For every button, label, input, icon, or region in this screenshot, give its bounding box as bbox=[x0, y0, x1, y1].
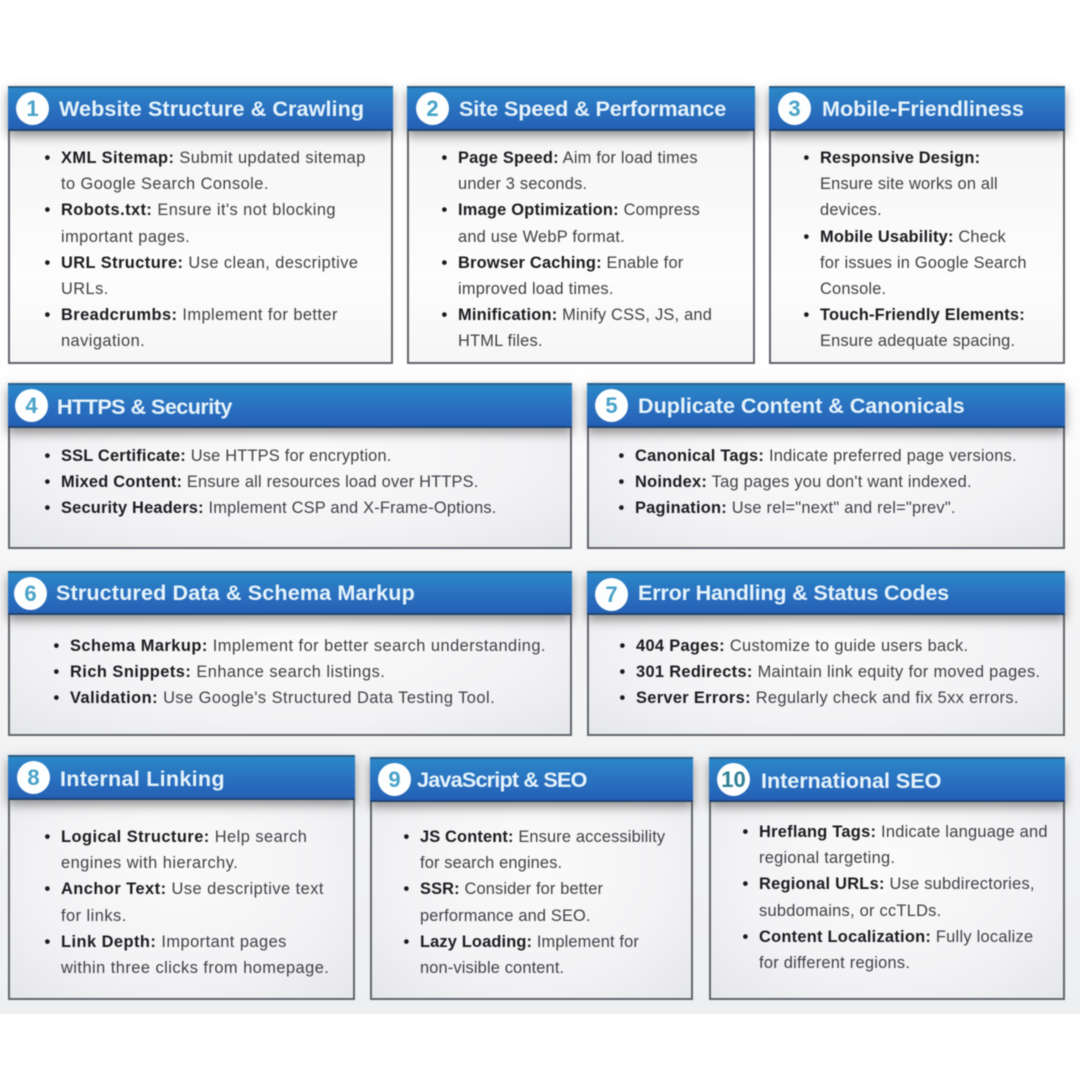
number badge 3 bbox=[778, 92, 811, 125]
checklist 3: devices. bbox=[820, 201, 882, 219]
checklist 8 bbox=[44, 828, 329, 978]
panel 6: structured data and schema markup bbox=[8, 571, 572, 736]
header 2 bbox=[407, 86, 755, 131]
checklist 5: Pagination: Use rel="next" and rel="prev". bbox=[635, 499, 956, 517]
checklist 4: Security Headers: Implement CSP and X-Frame-Options. bbox=[61, 499, 497, 517]
checklist 6: Validation: Use Google's Structured Data Testing Tool. bbox=[70, 689, 495, 707]
checklist 9: for search engines. bbox=[420, 854, 562, 872]
checklist 1: Breadcrumbs: Implement for better bbox=[61, 306, 338, 324]
header 3 bbox=[769, 86, 1065, 131]
heading 1: Website Structure & Crawling bbox=[59, 96, 364, 121]
checklist 10: Content Localization: Fully localize bbox=[759, 928, 1033, 946]
heading 4: HTTPS & Security bbox=[57, 394, 232, 419]
heading 6: Structured Data & Schema Markup bbox=[56, 580, 415, 605]
number badge 1: 1 bbox=[26, 96, 39, 121]
checklist 10: Hreflang Tags: Indicate language and bbox=[759, 823, 1048, 841]
header 9 bbox=[370, 757, 693, 802]
checklist 4 bbox=[44, 447, 497, 518]
number badge 10: 10 bbox=[721, 767, 746, 792]
checklist 1 bbox=[44, 149, 366, 350]
number badge 3: 3 bbox=[788, 96, 801, 121]
panel 1: website structure and crawling bbox=[8, 86, 393, 364]
number badge 8: 8 bbox=[27, 765, 40, 790]
checklist 1: URLs. bbox=[61, 280, 109, 298]
checklist 5: Canonical Tags: Indicate preferred page versions. bbox=[635, 447, 1017, 465]
header 7 bbox=[587, 571, 1065, 615]
checklist 10: for different regions. bbox=[759, 954, 910, 972]
heading 5: Duplicate Content & Canonicals bbox=[638, 393, 965, 418]
number badge 9: 9 bbox=[388, 767, 401, 792]
checklist 3: Mobile Usability: Check bbox=[820, 228, 1006, 246]
number badge 8 bbox=[17, 761, 50, 794]
number badge 7: 7 bbox=[605, 582, 618, 607]
checklist 1: navigation. bbox=[61, 332, 145, 350]
number badge 9 bbox=[378, 763, 411, 796]
checklist 7: Server Errors: Regularly check and fix 5xx errors. bbox=[636, 689, 1019, 707]
heading 10: International SEO bbox=[761, 768, 941, 793]
number badge 6 bbox=[14, 577, 47, 610]
header 6 bbox=[8, 571, 572, 615]
header 1 bbox=[8, 86, 393, 131]
header 5 bbox=[587, 383, 1065, 428]
checklist 3 bbox=[803, 149, 1027, 350]
checklist 3: for issues in Google Search bbox=[820, 254, 1027, 272]
checklist 2: improved load times. bbox=[458, 280, 614, 298]
panel 4: HTTPS and security bbox=[8, 383, 572, 549]
checklist 8: Logical Structure: Help search bbox=[61, 828, 307, 846]
header 10 bbox=[709, 757, 1065, 802]
checklist 1: XML Sitemap: Submit updated sitemap bbox=[61, 149, 366, 167]
checklist 8: Anchor Text: Use descriptive text bbox=[61, 880, 324, 898]
number badge 2: 2 bbox=[426, 96, 439, 121]
checklist 2 bbox=[441, 149, 712, 350]
panel 3: mobile friendliness bbox=[769, 86, 1065, 364]
checklist 8: Link Depth: Important pages bbox=[61, 933, 287, 951]
checklist 10: Regional URLs: Use subdirectories, bbox=[759, 875, 1035, 893]
checklist 2: under 3 seconds. bbox=[458, 175, 587, 193]
checklist 2: Page Speed: Aim for load times bbox=[458, 149, 698, 167]
checklist 7 bbox=[619, 637, 1040, 708]
checklist 7: 301 Redirects: Maintain link equity for moved pages. bbox=[636, 663, 1040, 681]
checklist 5: Noindex: Tag pages you don't want indexed. bbox=[635, 473, 972, 491]
heading 8: Internal Linking bbox=[60, 766, 225, 791]
number badge 4 bbox=[15, 389, 48, 422]
checklist 4: Mixed Content: Ensure all resources load over HTTPS. bbox=[61, 473, 479, 491]
checklist 2: Image Optimization: Compress bbox=[458, 201, 700, 219]
checklist 10: regional targeting. bbox=[759, 849, 895, 867]
panel 8: internal linking bbox=[8, 755, 355, 1000]
checklist 9: performance and SEO. bbox=[420, 907, 591, 925]
panel 2: site speed and performance bbox=[407, 86, 755, 364]
heading 3: Mobile-Friendliness bbox=[822, 96, 1024, 121]
checklist 8: within three clicks from homepage. bbox=[61, 959, 329, 977]
number badge 4: 4 bbox=[25, 393, 38, 418]
checklist 1: important pages. bbox=[61, 228, 190, 246]
number badge 10 bbox=[717, 763, 750, 796]
checklist 7: 404 Pages: Customize to guide users back. bbox=[636, 637, 968, 655]
checklist 2: Minification: Minify CSS, JS, and bbox=[458, 306, 712, 324]
checklist 3: Console. bbox=[820, 280, 886, 298]
checklist 9 bbox=[403, 828, 666, 977]
panel 7: error handling and status codes bbox=[587, 571, 1065, 736]
header 8 bbox=[8, 755, 355, 800]
checklist 2: HTML files. bbox=[458, 332, 543, 350]
panel 10: international SEO bbox=[709, 757, 1065, 1000]
checklist 10 bbox=[742, 823, 1048, 972]
checklist 3: Touch-Friendly Elements: bbox=[820, 306, 1025, 324]
checklist 4: SSL Certificate: Use HTTPS for encryption. bbox=[61, 447, 392, 465]
checklist 6: Rich Snippets: Enhance search listings. bbox=[70, 663, 385, 681]
checklist 6: Schema Markup: Implement for better search understanding. bbox=[70, 637, 546, 655]
checklist 9: SSR: Consider for better bbox=[420, 880, 603, 898]
number badge 2 bbox=[416, 92, 449, 125]
checklist 10: subdomains, or ccTLDs. bbox=[759, 902, 941, 920]
number badge 5: 5 bbox=[605, 393, 618, 418]
checklist 3: Responsive Design: bbox=[820, 149, 980, 167]
number badge 5 bbox=[595, 389, 628, 422]
checklist 6 bbox=[53, 637, 546, 708]
checklist 1: URL Structure: Use clean, descriptive bbox=[61, 254, 358, 272]
checklist 8: engines with hierarchy. bbox=[61, 854, 238, 872]
number badge 6: 6 bbox=[24, 581, 37, 606]
checklist 9: non-visible content. bbox=[420, 959, 564, 977]
panel 9: JavaScript and SEO bbox=[370, 757, 693, 1000]
heading 7: Error Handling & Status Codes bbox=[638, 580, 949, 605]
checklist 1: to Google Search Console. bbox=[61, 175, 269, 193]
header 4 bbox=[8, 383, 572, 428]
number badge 1 bbox=[16, 92, 49, 125]
checklist 3: Ensure site works on all bbox=[820, 175, 998, 193]
checklist 8: for links. bbox=[61, 907, 127, 925]
panel 5: duplicate content and canonicals bbox=[587, 383, 1065, 549]
number badge 7 bbox=[595, 578, 628, 611]
checklist 1: Robots.txt: Ensure it's not blocking bbox=[61, 201, 336, 219]
checklist 2: and use WebP format. bbox=[458, 228, 625, 246]
checklist 9: JS Content: Ensure accessibility bbox=[420, 828, 665, 846]
heading 9: JavaScript & SEO bbox=[417, 767, 587, 792]
heading 2: Site Speed & Performance bbox=[459, 96, 726, 121]
checklist 2: Browser Caching: Enable for bbox=[458, 254, 683, 272]
checklist 3: Ensure adequate spacing. bbox=[820, 332, 1015, 350]
checklist 9: Lazy Loading: Implement for bbox=[420, 933, 639, 951]
checklist 5 bbox=[618, 447, 1017, 518]
